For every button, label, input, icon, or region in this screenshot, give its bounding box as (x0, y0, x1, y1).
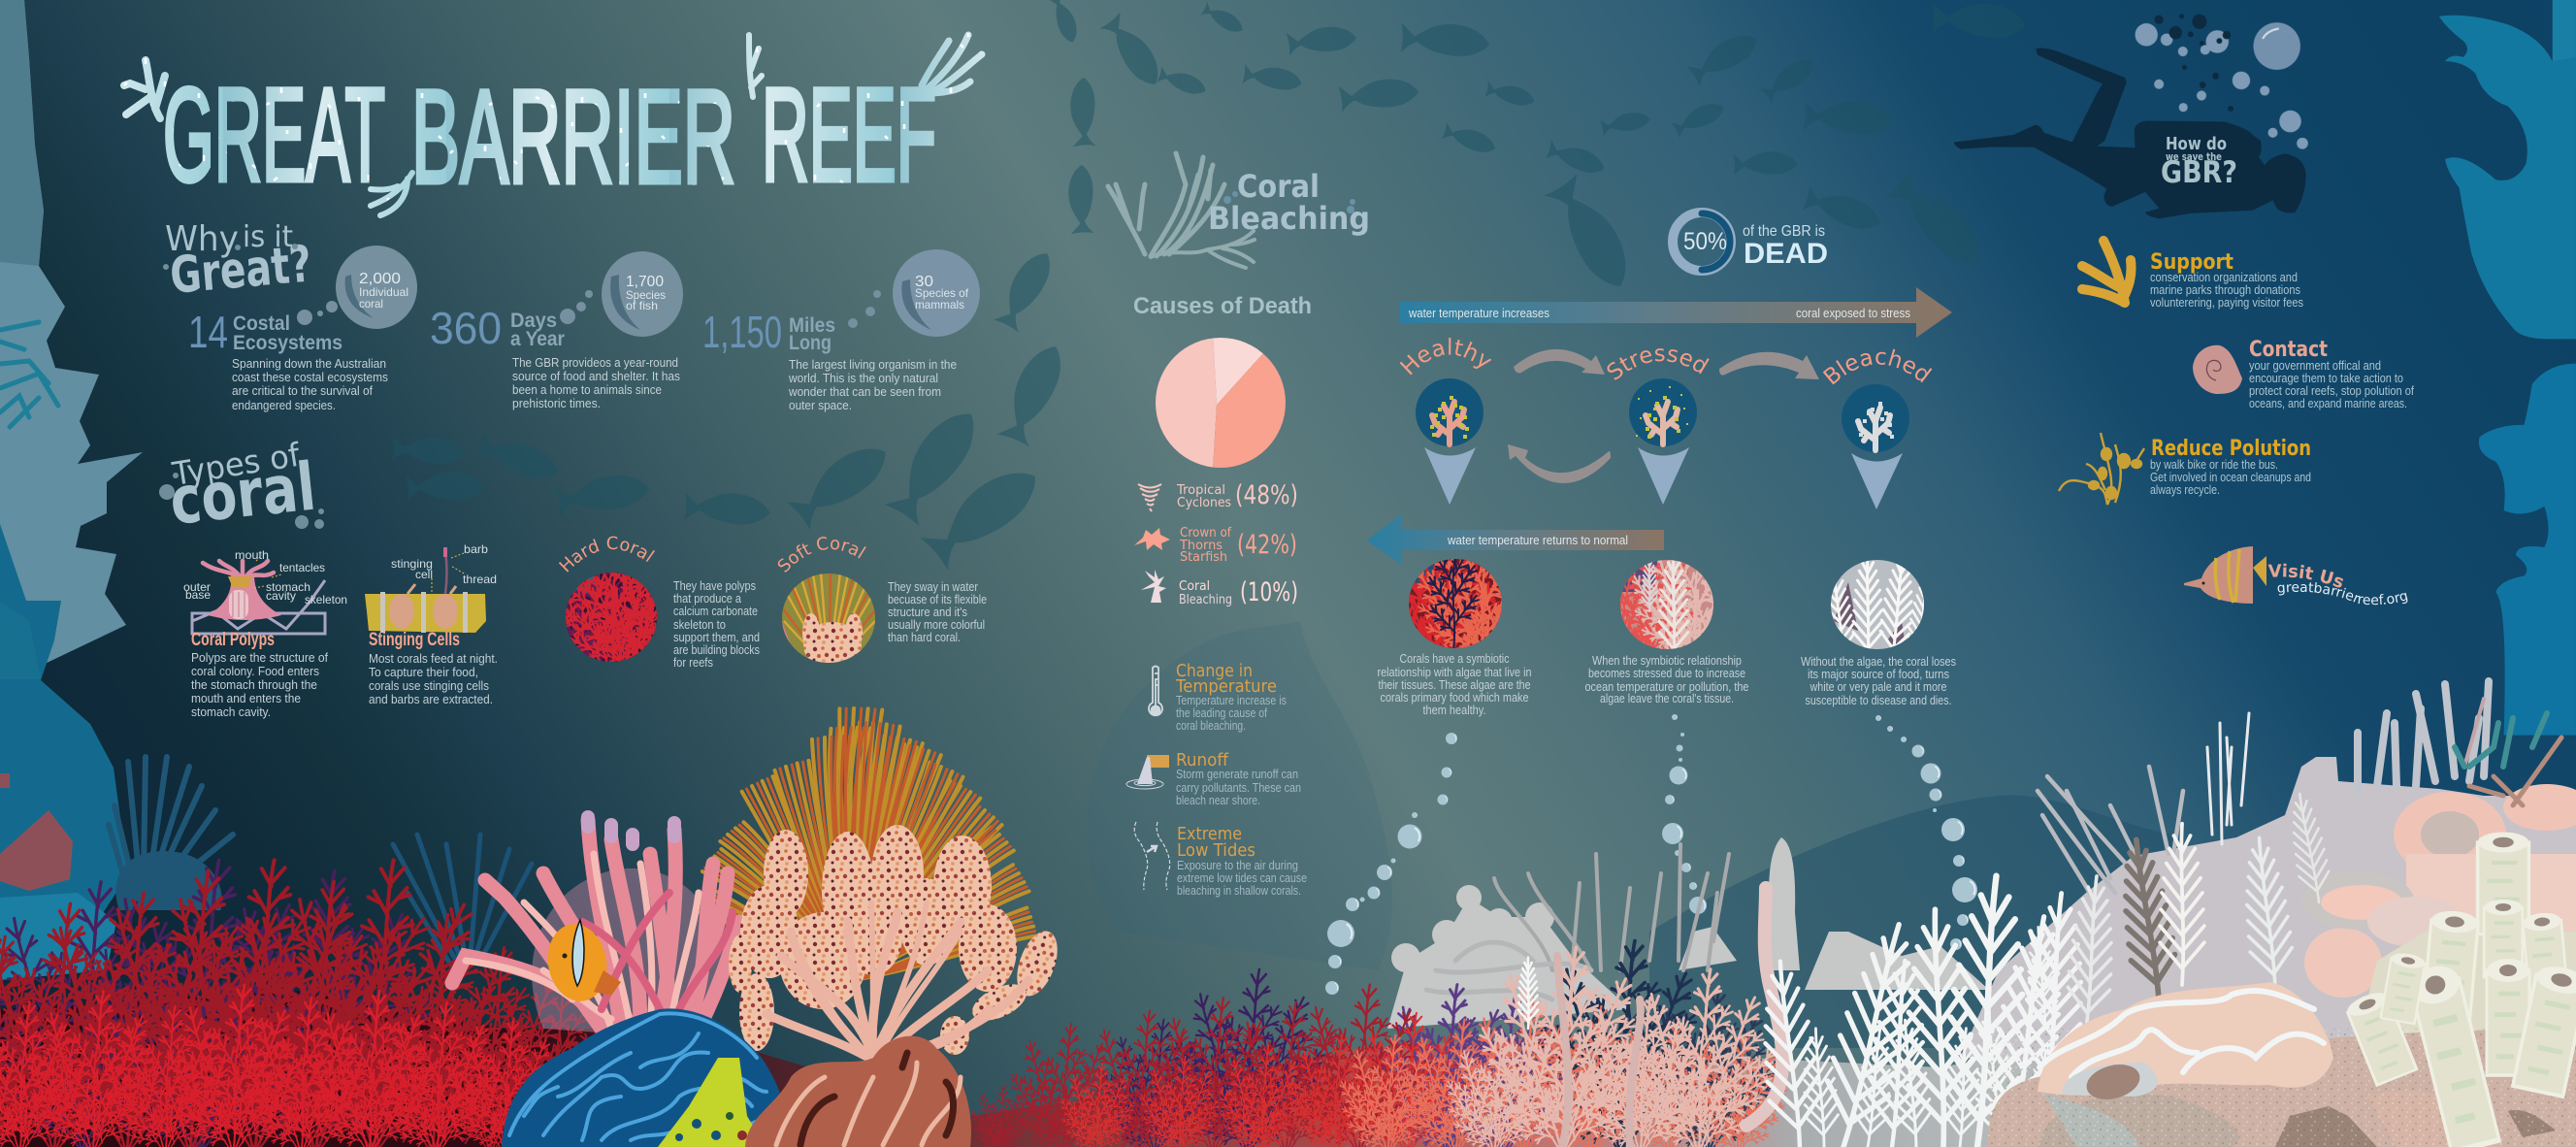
text: stinging cells: and barbs are extracted. (369, 692, 493, 706)
stat: 14 costal ecosystems: coast these costal ecosystems (232, 370, 388, 384)
panel: soft coral: becuase of its flexible (888, 592, 987, 606)
stat: 50% of the GBR is dead: DEAD (1744, 238, 1828, 270)
diagram: stinging cells (365, 542, 497, 633)
arrow: water temperature increases: coral exposed to stress (1796, 306, 1910, 320)
cause: change in temperature (1149, 661, 1287, 733)
labels: polyp parts: cavity (266, 589, 296, 603)
coral: teal fan on wall (0, 322, 58, 427)
action: visit us: Visit Us (2268, 563, 2344, 588)
legend: crown of thorns starfish: Crown of (1180, 526, 1231, 541)
panel: soft coral: usually more colorful (888, 617, 985, 632)
legend: coral bleaching: Coral (1179, 579, 1210, 594)
panel: hard coral: that produce a (673, 591, 742, 606)
stat: 360 days a year (430, 251, 683, 410)
cause: runoff: Runoff (1176, 750, 1229, 770)
labels: polyp parts: skeleton (305, 593, 347, 606)
coral: reeds (1426, 681, 2561, 1000)
bubble: 1,700 species of fish: of fish (626, 299, 658, 312)
icon: runoff (1126, 755, 1169, 789)
text: coral polyps: stomach cavity. (191, 705, 271, 719)
coral: red to salmon gorgonians centre (961, 888, 1801, 1147)
coral: white ferns (1518, 791, 2333, 1147)
heading: types of coral: coral (167, 449, 319, 541)
icon: starfish (1134, 528, 1170, 550)
legend: coral bleaching (1141, 570, 1298, 607)
bubble: 30 species of mammals (848, 249, 980, 337)
action: reduce polution: always recycle. (2150, 482, 2220, 497)
ring: 50 percent (1673, 213, 1731, 271)
stat: 360 days a year: The GBR provideos a year-round (512, 355, 678, 370)
cause: extreme low tides: bleaching in shallow corals. (1177, 883, 1301, 898)
coral: base rubble and white brain coral (1987, 982, 2576, 1147)
text: coral polyps: mouth and enters the (191, 691, 301, 705)
icon: thermometer (1149, 666, 1162, 715)
text: bleached explanation: susceptible to disease and dies. (1805, 693, 1952, 707)
text: stinging cells: To capture their food, (369, 665, 478, 679)
action: contact (2193, 338, 2414, 410)
coral: yellow-green sponge (658, 1058, 766, 1147)
cause: change in temperature: Temperature (1175, 676, 1277, 697)
cause: change in temperature: coral bleaching. (1176, 718, 1246, 733)
stat: 14 costal ecosystems: are critical to the survival of (232, 383, 373, 398)
labels: polyp parts: base (185, 588, 211, 602)
arrow: healthy to stressed (1514, 349, 1605, 375)
bubble: 1,700 species of fish (560, 251, 683, 337)
icon: tide waves (1134, 822, 1170, 890)
stat: 1,150 miles long: 1,150 (702, 307, 782, 357)
action: reduce polution (2059, 433, 2311, 505)
heading: coral bleaching: Coral (1237, 168, 1320, 205)
cause: extreme low tides: Low Tides (1177, 840, 1255, 861)
diver with call to action heading: GBR? (2161, 155, 2237, 190)
icon: cyclone (1138, 484, 1161, 511)
pie chart: causes of death (1156, 338, 1286, 468)
image: hard coral circle (566, 573, 657, 662)
icon: healthy coral (1416, 378, 1484, 505)
stat: 1,150 miles long: Long (789, 332, 831, 354)
labels: polyp parts: tentacles (279, 561, 325, 574)
action: contact: protect coral reefs, stop polution of (2249, 383, 2414, 398)
stat: 14 costal ecosystems: endangered species. (232, 398, 336, 412)
text: stressed explanation: When the symbiotic relationship (1592, 653, 1742, 668)
text: healthy explanation: Corals have a symbiotic (1399, 651, 1510, 666)
coral: brown brain coral (745, 1036, 971, 1147)
title seaweed (124, 35, 982, 215)
image: soft coral circle (782, 574, 875, 663)
arrow: water temperature returns to normal: water temperature returns to normal (1447, 533, 1628, 547)
stat: 360 days a year: source of food and shelter. It has (512, 369, 680, 383)
coral: bright red fans (0, 982, 576, 1147)
text: stressed explanation: ocean temperature or pollution, the (1585, 679, 1748, 694)
action: visit us: greatbarrierreef.org (2278, 582, 2408, 606)
coral: blue brain coral (502, 1008, 787, 1147)
panel: hard coral: Hard Coral (559, 536, 655, 573)
action: support: marine parks through donations (2150, 282, 2300, 297)
action: contact: your government offical and (2249, 358, 2381, 373)
panel: hard coral: for reefs (673, 655, 713, 670)
icon: gold coral (2082, 241, 2132, 303)
panel: soft coral: Soft Coral (778, 537, 866, 573)
labels: polyp parts: stomach (266, 580, 310, 594)
text: stinging cells (369, 630, 498, 706)
text: healthy explanation (1378, 651, 1531, 717)
bubble: 1,700 species of fish: Species (626, 288, 666, 302)
coral: dark red fans (0, 856, 645, 1147)
arrow: stressed to healthy (1508, 444, 1611, 483)
panel: hard coral: support them, and (673, 630, 760, 644)
panel: hard coral (559, 536, 760, 670)
coral: base patches (1987, 1029, 2576, 1147)
diagram: coral polyp (183, 548, 347, 634)
legend: crown of thorns starfish: (42%) (1237, 530, 1297, 560)
legend: crown of thorns starfish: Starfish (1180, 550, 1227, 565)
panel: soft coral: structure and it's (888, 605, 967, 619)
bubble: 2,000 individual coral (297, 246, 417, 329)
title: REEF (762, 61, 936, 210)
bubble streams (1325, 714, 1977, 995)
stage: stressed: Stressed (1607, 348, 1710, 380)
heading: why is it great: is it (243, 220, 293, 254)
panel: hard coral: calcium carbonate (673, 604, 758, 618)
stat: 1,150 miles long: wonder that can be seen from (788, 384, 941, 399)
icon: shell (2193, 345, 2242, 394)
cause: change in temperature: the leading cause of (1176, 705, 1267, 720)
heading: why is it great (163, 219, 314, 306)
labels: stinging parts: cell (415, 568, 433, 581)
stage: bleached: Bleached (1822, 349, 1933, 384)
text: bleached explanation: its major source of food, turns (1808, 667, 1949, 681)
diver with call to action heading (1954, 14, 2308, 218)
photo circle: healthy coral (1409, 559, 1502, 648)
legend: tropical cyclones (1138, 480, 1298, 511)
reef floor: back colour mass (0, 990, 2576, 1147)
text: healthy explanation: their tissues. These algae are the (1378, 677, 1531, 692)
bubble: 30 species of mammals: mammals (915, 298, 964, 311)
title (124, 35, 982, 215)
stat: 1,150 miles long: world. This is the only natural (788, 371, 938, 385)
cause: extreme low tides (1134, 822, 1307, 898)
stat: 14 costal ecosystems: Costal (233, 312, 290, 335)
cause: change in temperature: Temperature increase is (1176, 693, 1287, 707)
stat: 50% of the GBR is dead: of the GBR is (1743, 223, 1825, 240)
stat: 1,150 miles long: outer space. (789, 398, 852, 412)
icon: butterfly fish (2184, 546, 2266, 604)
stat: 14 costal ecosystems (188, 246, 417, 412)
cause: extreme low tides: extreme low tides can cause (1177, 870, 1307, 885)
coral: lavender mound (1960, 757, 2576, 1067)
coral: pale reeds right (2038, 681, 2489, 902)
cause: runoff: carry pollutants. These can (1176, 780, 1301, 795)
heading: why is it great: Why (165, 219, 239, 259)
legend: crown of thorns starfish: Thorns (1179, 539, 1223, 553)
text: stressed explanation: algae leave the coral's tissue. (1600, 691, 1734, 705)
text: healthy explanation: corals primary food which make (1380, 690, 1529, 705)
labels: polyp parts: mouth (235, 548, 269, 562)
photo circle: stressed coral (1620, 560, 1713, 649)
panel: hard coral: They have polyps (673, 578, 756, 593)
cause: extreme low tides: Extreme (1177, 824, 1242, 844)
legend: tropical cyclones: (48%) (1235, 480, 1298, 510)
text: stinging cells: Stinging Cells (369, 630, 460, 650)
text: bleached explanation: white or very pale and it more (1810, 679, 1946, 694)
stat: 1,150 miles long: Miles (789, 314, 835, 337)
action: contact: encourage them to take action to (2249, 371, 2403, 385)
coral: salmon fans (1321, 996, 1801, 1147)
stat: 360 days a year: a Year (510, 328, 565, 350)
coral: pale tube sponges (2344, 833, 2576, 1147)
legend: tropical cyclones: Cyclones (1177, 496, 1231, 510)
text: coral polyps: the stomach through the (191, 677, 317, 692)
text: stinging cells: Most corals feed at night. (369, 651, 498, 666)
coral: pale pink fans (1428, 888, 1796, 1147)
icon: bleached coral (1141, 570, 1166, 603)
stat: 50% of the GBR is dead: 50% (1683, 228, 1727, 255)
cause: change in temperature: Change in (1176, 661, 1253, 681)
panel: soft coral (778, 537, 987, 663)
heading: causes of death: Causes of Death (1133, 293, 1312, 319)
legend: coral bleaching: Bleaching (1179, 593, 1232, 607)
stat: 14 costal ecosystems: Ecosystems (233, 332, 342, 354)
icon: bleached seaweed (1108, 153, 1255, 268)
stage: healthy (1399, 338, 1492, 505)
cause: runoff: Storm generate runoff can (1176, 767, 1298, 781)
action: visit us (2184, 546, 2408, 606)
coral: pink balls (2301, 784, 2576, 1082)
action: support: volunterering, paying visitor fees (2150, 295, 2303, 310)
action: reduce polution: Reduce Polution (2151, 437, 2311, 461)
stat: 360 days a year: 360 (430, 303, 502, 353)
coral: white brain (2038, 982, 2333, 1096)
coral: orange-yellow fan (685, 694, 1058, 999)
bubble: 2,000 individual coral: coral (359, 297, 383, 311)
heading: coral bleaching (1108, 153, 1370, 268)
bubble: 2,000 individual coral: Individual (359, 285, 408, 299)
cause: extreme low tides: Exposure to the air during (1177, 858, 1298, 872)
title: BARRIER (411, 63, 735, 212)
coral: blue feather plant (109, 757, 233, 907)
legend: coral bleaching: (10%) (1240, 577, 1298, 607)
bubble: 1,700 species of fish: 1,700 (626, 274, 664, 290)
coral: purple back fans (0, 856, 466, 1147)
background: faint hill shapes (1087, 621, 2173, 1048)
icon: clownfish (542, 919, 621, 1006)
coral: grey reeds left (1426, 844, 1729, 1000)
text: stressed explanation: becomes stressed due to increase (1588, 666, 1745, 680)
text: stressed explanation (1585, 653, 1748, 705)
stat: 1,150 miles long (702, 249, 980, 412)
arrow: water temperature increases (1399, 287, 1952, 338)
text: bleached explanation: Without the algae, the coral loses (1801, 654, 1956, 669)
diver with call to action heading: How do (2166, 134, 2227, 154)
stage: healthy: Healthy (1399, 338, 1492, 375)
text: bleached explanation (1801, 654, 1956, 707)
coral: pale clumps and mound (1387, 757, 2576, 1082)
action: support: Support (2150, 250, 2234, 275)
panel: soft coral: They sway in water (888, 579, 979, 594)
panel: hard coral: skeleton to (673, 617, 726, 632)
action: contact: oceans, and expand marine areas. (2249, 396, 2407, 410)
coral: teal branches top right (2455, 713, 2561, 805)
heading: types of coral: Types of (169, 436, 304, 493)
coral: speckled pink soft coral (729, 825, 1065, 1063)
title: GREAT (163, 61, 385, 210)
coral: red gorgonians left (0, 856, 645, 1147)
arrow: water temperature increases: water temperature increases (1408, 306, 1549, 320)
diver with call to action heading: we save the (2166, 150, 2222, 163)
arrow: water temperature returns to normal (1367, 514, 1664, 565)
diver silhouette and bubbles (1954, 14, 2308, 218)
stat: 360 days a year: prehistoric times. (512, 396, 601, 410)
left wall: coral silhouettes (0, 0, 532, 980)
text: coral polyps: Polyps are the structure of (191, 650, 328, 665)
bubble: 30 species of mammals: 30 (915, 274, 933, 290)
coral: blue feather plant centre (393, 835, 532, 966)
labels: stinging parts (391, 542, 497, 586)
bubble: 30 species of mammals: Species of (915, 286, 969, 300)
labels: polyp parts: outer (183, 580, 211, 594)
coral: pink anemone (452, 817, 739, 1038)
stage: bleached (1822, 349, 1933, 509)
stat: 14 costal ecosystems: Spanning down the Australian (232, 356, 386, 371)
action: contact: Contact (2249, 338, 2328, 362)
icon: bleached coral (1842, 384, 1909, 509)
heading: why is it great: Great? (168, 235, 314, 306)
stage: stressed (1607, 348, 1710, 505)
icon: kelp (2059, 433, 2144, 505)
stat: 1,150 miles long: The largest living organism in the (789, 357, 957, 372)
right wall: blue coral silhouettes (2439, 0, 2576, 736)
action: support: conservation organizations and (2150, 270, 2298, 284)
action: reduce polution: by walk bike or ride the bus. (2150, 457, 2278, 472)
text: healthy explanation: relationship with algae that live in (1378, 665, 1531, 679)
labels: stinging parts: barb (464, 542, 488, 556)
coral: dark red fans (961, 982, 1449, 1147)
stat: 14 costal ecosystems: 14 (188, 307, 228, 357)
cause: runoff: bleach near shore. (1176, 793, 1260, 807)
action: support (2082, 241, 2303, 310)
coral: purple and navy backs (1080, 937, 1795, 1147)
fish school silhouettes (391, 0, 2027, 572)
labels: stinging parts: thread (463, 573, 497, 586)
action: reduce polution: Get involved in ocean cleanups and (2150, 470, 2311, 484)
heading: coral bleaching: Bleaching (1208, 200, 1370, 237)
coral: bright red fans (1046, 1011, 1483, 1147)
stat: 50% of the GBR is dead (1673, 213, 1828, 271)
labels: polyp parts (183, 548, 347, 606)
icon: stressed coral (1629, 378, 1697, 505)
text: coral polyps: Coral Polyps (191, 630, 275, 650)
legend: crown of thorns starfish (1134, 526, 1297, 565)
panel: hard coral: are building blocks (673, 642, 760, 657)
labels: stinging parts: stinging (391, 557, 433, 571)
photo circle: bleached coral (1831, 560, 1924, 649)
cause: runoff (1126, 750, 1301, 807)
legend: tropical cyclones: Tropical (1176, 483, 1225, 498)
panel: soft coral: than hard coral. (888, 630, 961, 644)
stat: 360 days a year: Days (510, 310, 557, 332)
arrow: stressed to bleached (1719, 352, 1819, 379)
stat: 360 days a year: been a home to animals since (512, 382, 662, 397)
text: coral polyps (191, 630, 328, 719)
text: stinging cells: corals use stinging cells (369, 678, 489, 693)
bubble: 2,000 individual coral: 2,000 (359, 271, 401, 287)
text: coral polyps: coral colony. Food enters (191, 664, 319, 678)
text: healthy explanation: them healthy. (1422, 703, 1486, 717)
coral: grey lumps (1387, 837, 1989, 1029)
